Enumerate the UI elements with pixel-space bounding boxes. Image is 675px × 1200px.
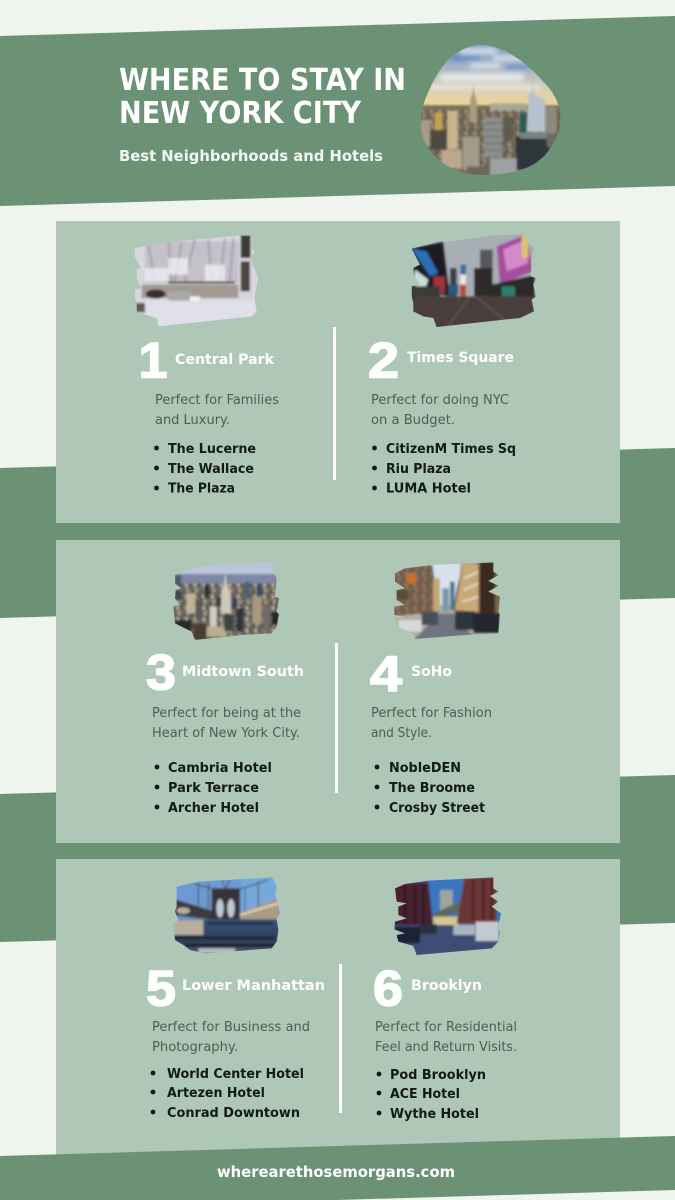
vertical divider row two [335, 643, 338, 793]
photo: Midtown skyline [174, 562, 279, 640]
hotel list: The Lucerne [168, 441, 256, 457]
hotel list: Riu Plaza [386, 461, 451, 477]
description: Perfect for Fashion [371, 706, 492, 721]
numeral 6: 6 [373, 960, 403, 1016]
neighborhood name: Brooklyn [411, 978, 482, 994]
numeral 2: 2 [368, 332, 399, 388]
description: Photography. [152, 1040, 238, 1055]
hotel list: CitizenM Times Sq [386, 441, 516, 457]
description [155, 393, 279, 428]
hotel list [375, 760, 485, 816]
description: and Luxury. [155, 413, 230, 428]
section 2: Times Square [368, 332, 516, 496]
panel: card row one [56, 221, 620, 523]
subtitle: Best Neighborhoods and Hotels [119, 147, 383, 165]
title [119, 63, 406, 131]
hotel list: Conrad Downtown [167, 1105, 300, 1121]
hotel list: The Broome [389, 780, 475, 796]
footer band [0, 1136, 675, 1200]
photo: Central Park in snow [134, 236, 258, 326]
description: and Style. [371, 726, 432, 741]
description: Heart of New York City. [152, 726, 300, 741]
numeral 5: 5 [146, 960, 176, 1016]
hotel list [151, 1066, 304, 1121]
hotel list: Park Terrace [168, 780, 259, 796]
description: Perfect for Residential [375, 1020, 517, 1035]
description: Perfect for Families [155, 393, 279, 408]
neighborhood name: Central Park [175, 352, 274, 368]
neighborhood name: SoHo [411, 664, 452, 680]
hotel list: Pod Brooklyn [390, 1067, 486, 1083]
description: Perfect for doing NYC [371, 393, 509, 408]
neighborhood name: Midtown South [182, 664, 304, 680]
hotel list: NobleDEN [389, 760, 461, 776]
hotel list: World Center Hotel [167, 1066, 304, 1082]
numeral 4: 4 [370, 646, 402, 702]
title: WHERE TO STAY IN [119, 63, 406, 98]
band: middle lower [0, 775, 675, 942]
neighborhood name: Times Square [407, 350, 514, 366]
description [152, 706, 301, 741]
section 1: Central Park [138, 332, 279, 496]
photo: Brooklyn Bridge [174, 878, 280, 954]
description [371, 706, 492, 741]
numeral 1: 1 [138, 332, 168, 388]
section 4: SoHo [370, 646, 492, 816]
hotel list: Artezen Hotel [167, 1085, 265, 1101]
description: Perfect for Business and [152, 1020, 310, 1035]
description [371, 393, 509, 428]
description: on a Budget. [371, 413, 455, 428]
footer website: wherearethosemorgans.com [217, 1163, 455, 1181]
hotel list [154, 441, 256, 496]
section 3: Midtown South [146, 644, 304, 816]
photo: Times Square [412, 234, 536, 327]
hotel list: ACE Hotel [390, 1086, 460, 1102]
description: Perfect for being at the [152, 706, 301, 721]
panel: card row two [56, 540, 620, 843]
panel: card row three [56, 859, 620, 1164]
photo: Brooklyn street [394, 878, 501, 955]
hotel list [372, 441, 516, 496]
header band [0, 16, 675, 206]
description [152, 1020, 310, 1055]
hotel list: The Plaza [168, 480, 235, 496]
section 5: Lower Manhattan [146, 960, 325, 1121]
title: NEW YORK CITY [119, 96, 362, 131]
vertical divider row one [333, 327, 336, 480]
section 6: Brooklyn [373, 960, 517, 1122]
band: middle upper [0, 448, 675, 618]
hotel list: Cambria Hotel [168, 760, 272, 776]
hotel list: The Wallace [168, 461, 254, 477]
hotel list: Crosby Street [389, 800, 485, 816]
description: Feel and Return Visits. [375, 1040, 517, 1055]
description [375, 1020, 517, 1055]
photo: SoHo street [394, 562, 500, 639]
hotel list: Archer Hotel [168, 800, 259, 816]
numeral 3: 3 [146, 644, 176, 700]
hotel list: Wythe Hotel [390, 1106, 479, 1122]
hotel list [377, 1067, 486, 1122]
vertical divider row three [339, 964, 342, 1113]
neighborhood name: Lower Manhattan [182, 978, 325, 994]
hotel list [155, 760, 272, 816]
hotel list: LUMA Hotel [386, 480, 471, 496]
photo: New York skyline blob [420, 45, 560, 175]
